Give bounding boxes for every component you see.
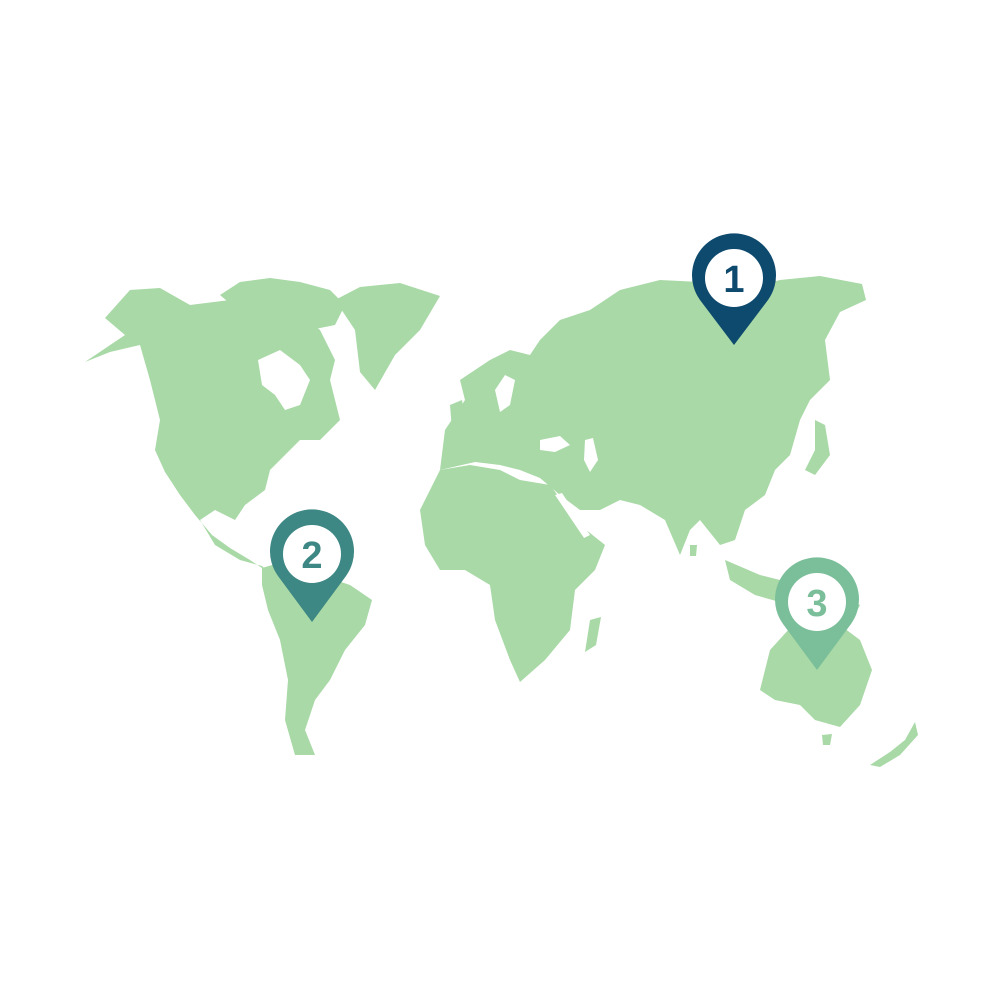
island: tasmania — [822, 734, 832, 745]
islands: sri lanka — [690, 545, 697, 556]
pin 3: australia: 3 — [806, 583, 828, 625]
baltic sea — [495, 375, 515, 412]
water features — [258, 350, 598, 538]
map: continents — [85, 276, 918, 767]
islands: uk — [450, 400, 466, 430]
islands: indonesia — [725, 560, 860, 615]
hudson bay — [258, 350, 310, 410]
continent: south america — [262, 560, 372, 755]
continent: eurasia — [440, 276, 866, 555]
black sea — [540, 436, 570, 452]
pin 1: northern asia: 1 — [723, 259, 745, 301]
continent: africa — [420, 465, 605, 682]
island: new zealand — [870, 722, 918, 767]
islands: japan — [805, 420, 830, 475]
continent: greenland — [335, 283, 440, 390]
pin 3: australia — [775, 557, 859, 670]
continent: arctic islands — [220, 278, 345, 330]
continent: north america — [85, 288, 340, 572]
pin 1: northern asia — [692, 233, 776, 345]
red sea — [555, 493, 590, 538]
continent: australia — [760, 610, 872, 727]
pin 2: south america: 2 — [301, 535, 323, 577]
pin 2: south america — [270, 509, 354, 622]
caspian sea — [584, 438, 598, 472]
island: madagascar — [585, 617, 601, 652]
